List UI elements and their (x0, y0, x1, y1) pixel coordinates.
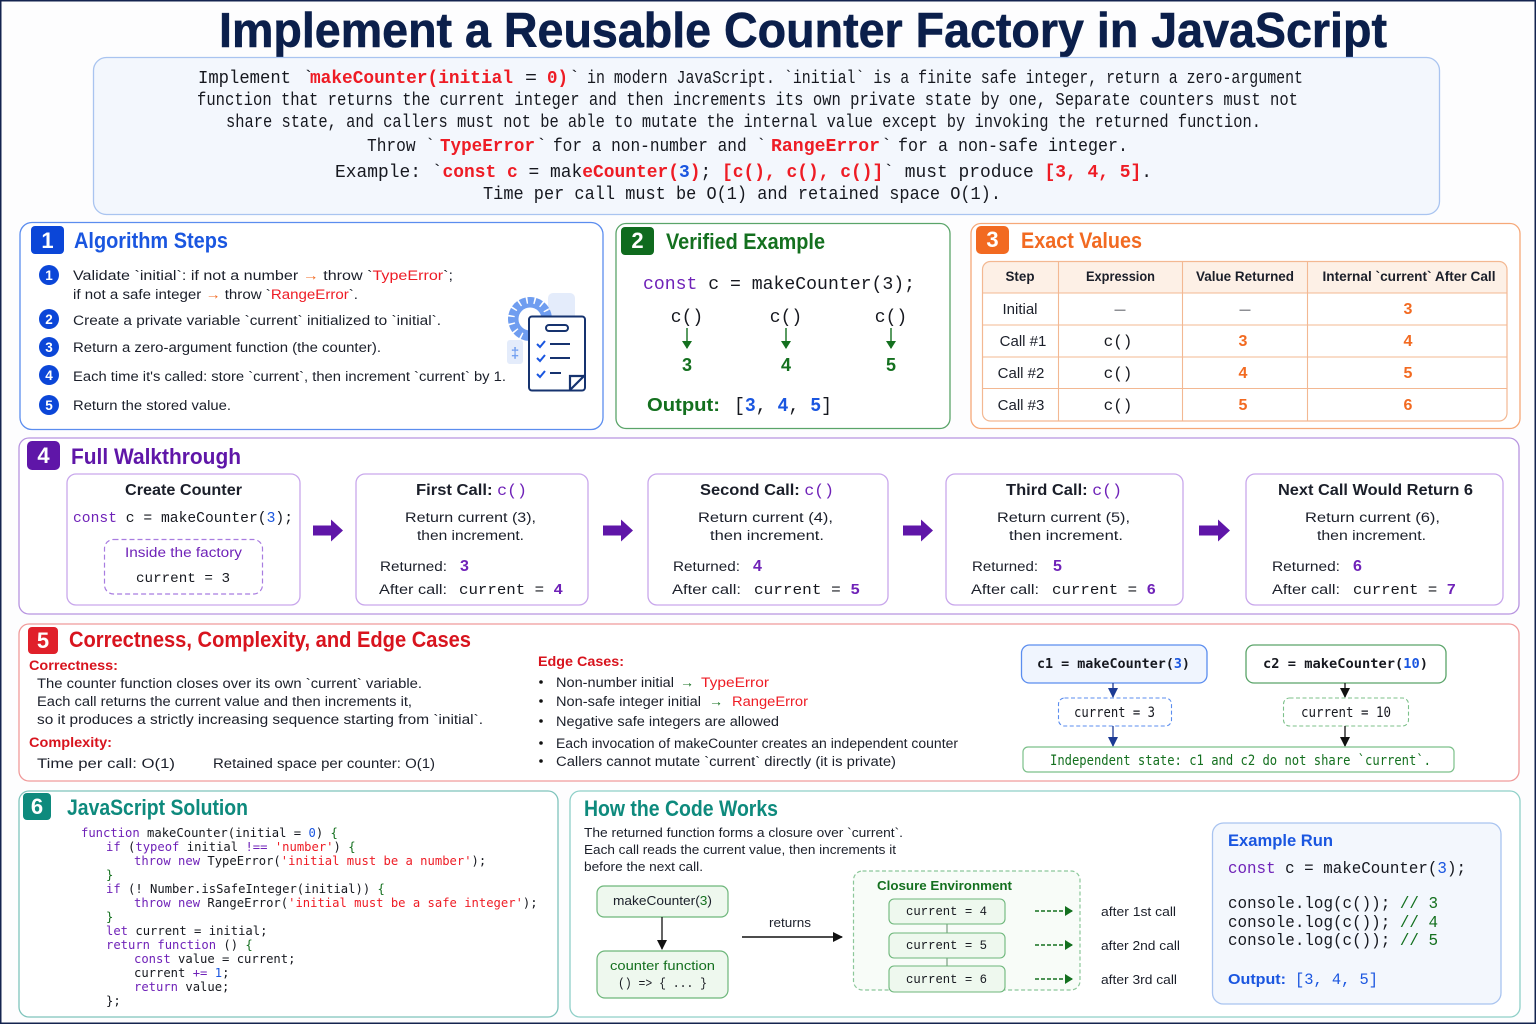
code block: } (106, 868, 113, 882)
code block: throw new TypeError('initial must be a number'); (134, 854, 486, 868)
flow: factory to counter function (597, 886, 728, 998)
table: c() (1104, 397, 1132, 415)
card: second call (648, 474, 888, 605)
card: create counter: Create Counter (125, 482, 242, 499)
text: correctness (29, 657, 483, 727)
card: next call: Return current (6), (1305, 510, 1440, 525)
card: first call (356, 474, 588, 605)
example run: [3, 4, 5] (1295, 971, 1378, 989)
call 1 (671, 308, 703, 375)
diagram: independent counters: c1 = makeCounter(3) (1037, 656, 1190, 672)
code block: current += 1; (134, 966, 229, 980)
call 3: 5 (886, 355, 896, 375)
closure environment (854, 871, 1080, 992)
example run: console.log(c()); // 3 (1228, 894, 1438, 913)
inner box: inside the factory: Inside the factory (125, 545, 242, 560)
code block: return function () { (106, 938, 253, 952)
badge 1: 1 (41, 228, 54, 253)
heading: how the code works: How the Code Works (584, 796, 778, 821)
step 2: Create a private variable `current` initialized to `initial`. (73, 313, 441, 328)
heading: verified example: Verified Example (666, 229, 825, 254)
example run: console.log(c()); // 5 (1228, 931, 1438, 950)
badge 6: 6 (31, 794, 43, 819)
text: edge cases: → (709, 694, 723, 709)
badge 5 (28, 627, 58, 654)
diagram: independent counters: c2 = makeCounter(10) (1263, 656, 1428, 672)
closure environment: current = 5 (906, 938, 987, 953)
arrow (1199, 520, 1230, 542)
card: next call: After call: (1272, 582, 1340, 597)
text: edge cases: RangeError (732, 694, 809, 709)
closure environment: current = 4 (906, 904, 987, 919)
dashed arrows with labels: after 1st call (1101, 905, 1176, 919)
card: next call: Next Call Would Return 6 (1278, 482, 1473, 499)
explanation text (584, 825, 903, 874)
flow: factory to counter function: counter function (610, 958, 715, 973)
code block: if (! Number.isSafeInteger(initial)) { (106, 882, 385, 896)
card: first call: then increment. (417, 528, 524, 543)
text: edge cases: Each invocation of makeCounter creates an independent counter (556, 736, 959, 751)
text: correctness: Each call returns the current value and then increments it, (37, 694, 412, 709)
diagram: independent counters: current = 3 (1074, 705, 1155, 721)
card: third call: Returned: (972, 559, 1038, 574)
arrow: returns: returns (769, 916, 811, 930)
flow: factory to counter function: makeCounter( 3) (613, 893, 712, 908)
panel 2: verified example (616, 224, 950, 428)
card: second call: Returned: (673, 559, 740, 574)
card: first call: First Call: c() (416, 482, 527, 500)
panel: problem statement: Example: `const c = makeCounter(3); [c(), c(), c()]` must produce [3, 4, 5]. (335, 163, 1152, 183)
panel: problem statement: ` (881, 137, 892, 157)
text: edge cases: Edge Cases: (538, 653, 624, 669)
table: 3 (1404, 301, 1413, 318)
badge 1 (31, 226, 64, 254)
panel: problem statement: Throw ` (367, 137, 435, 157)
step 5: Return the stored value. (73, 398, 231, 413)
call 1: 3 (682, 355, 692, 375)
inner box: inside the factory: current = 3 (136, 571, 230, 587)
card: third call: Return current (5), (997, 510, 1130, 525)
panel 1: algorithm steps (20, 222, 603, 430)
step 3 (39, 337, 381, 357)
heading: full walkthrough: Full Walkthrough (71, 444, 241, 469)
call 2: 4 (781, 355, 791, 375)
example run (1212, 823, 1501, 1004)
example run: const c = makeCounter(3); (1228, 859, 1466, 878)
step 1: 1 (45, 268, 53, 283)
step 5: 5 (45, 398, 53, 413)
table: 3 (1239, 333, 1248, 350)
table: 5 (1239, 397, 1248, 414)
panel: problem statement: RangeError (771, 137, 880, 157)
panel: problem statement: ` (536, 137, 547, 157)
icon: clipboard with gear: ‡ (511, 345, 519, 362)
table: Call #3 (998, 397, 1044, 414)
dashed arrows with labels (1035, 905, 1180, 987)
panel: problem statement: Time per call must be O(1) and retained space O(1). (483, 185, 1001, 205)
panel: problem statement: share state, and callers must not be able to mutate the internal value except by invoking the returned function. (226, 113, 1261, 133)
card: first call: Return current (3), (405, 510, 536, 525)
panel: problem statement: ` (569, 69, 580, 89)
text: edge cases: → (680, 675, 694, 690)
step 1 (39, 265, 453, 302)
table: c() (1104, 333, 1132, 351)
icon: clipboard with gear (507, 293, 585, 390)
output: Output: (647, 395, 720, 415)
dashed arrows with labels: after 2nd call (1101, 939, 1180, 953)
badge 6 (23, 793, 51, 820)
card: first call: Returned: (380, 559, 447, 574)
code block: let current = initial; (106, 924, 267, 938)
dashed arrows with labels: after 3rd call (1101, 973, 1177, 987)
card: third call: current = 6 (1052, 583, 1156, 599)
panel: problem statement: 0) (547, 69, 568, 89)
explanation text: The returned function forms a closure over `current`. (584, 825, 903, 840)
panel: problem statement: TypeError (440, 137, 535, 157)
table: Initial (1002, 301, 1038, 318)
table: 4 (1404, 333, 1413, 350)
card: third call (946, 474, 1183, 605)
panel: problem statement: for a non-safe integer. (898, 137, 1128, 157)
example run: console.log(c()); // 4 (1228, 913, 1438, 932)
step 2 (39, 309, 441, 329)
call 1: c() (671, 308, 703, 328)
table (982, 261, 1507, 421)
step 4: Each time it's called: store `current`, then increment `current` by 1. (73, 369, 506, 384)
explanation text: Each call reads the current value, then increments it (584, 842, 896, 857)
card: next call (1246, 474, 1503, 605)
closure environment: Closure Environment (877, 878, 1013, 893)
panel: problem statement: in modern JavaScript. `initial` is a finite safe integer, return a zero-argument (587, 69, 1303, 89)
code line: const c = makeCounter(3); (643, 275, 915, 295)
text: edge cases: Negative safe integers are allowed (556, 714, 779, 729)
panel: problem statement (94, 58, 1440, 214)
step 3: Return a zero-argument function (the counter). (73, 340, 381, 355)
panel: problem statement: Implement (198, 69, 291, 89)
table: 5 (1404, 365, 1413, 382)
panel: problem statement: function that returns the current integer and then increments its own private state by one, Separate counters must not (197, 91, 1298, 111)
step 3: 3 (45, 340, 53, 355)
code block (81, 826, 538, 1008)
code block: }; (106, 994, 121, 1008)
card: third call: then increment. (1009, 528, 1123, 543)
table: Call #2 (998, 365, 1044, 382)
card: first call: After call: (379, 582, 447, 597)
table: Internal `current` After Call (1322, 269, 1496, 284)
closure environment: current = 6 (906, 972, 987, 987)
card: first call: 3 (460, 558, 469, 575)
badge 4 (27, 441, 60, 470)
badge 2: 2 (631, 228, 644, 253)
heading: exact values: Exact Values (1021, 228, 1142, 253)
panel 3: exact values (971, 224, 1520, 428)
code block: const value = current; (134, 952, 295, 966)
card: next call: current = 7 (1353, 583, 1456, 599)
panel: problem statement: for a non-number and ` (553, 137, 766, 157)
card: third call: Third Call: c() (1006, 482, 1122, 500)
code block: } (106, 910, 113, 924)
table: Expression (1086, 269, 1155, 284)
text: edge cases: TypeError (701, 675, 770, 690)
card: third call: 5 (1053, 558, 1062, 575)
step 5 (39, 395, 231, 415)
card: second call: then increment. (710, 528, 824, 543)
heading: algorithm steps: Algorithm Steps (74, 228, 228, 253)
card: second call: 4 (753, 558, 762, 575)
card: second call: Second Call: c() (700, 482, 834, 500)
text: edge cases: Non-safe integer initial (556, 694, 701, 709)
flow: factory to counter function: () => { ... } (618, 976, 707, 991)
arrow (603, 520, 633, 542)
badge 2 (621, 227, 654, 255)
text: correctness: The counter function closes over its own `current` variable. (37, 676, 422, 691)
badge 5: 5 (37, 628, 49, 653)
card: second call: Return current (4), (698, 510, 833, 525)
card: first call: current = 4 (459, 583, 563, 599)
panel 4: full walkthrough (19, 438, 1519, 614)
call 2 (770, 308, 802, 375)
arrow (313, 520, 343, 542)
panel: problem statement: = (525, 69, 537, 89)
text: edge cases (538, 653, 959, 769)
heading: javascript solution: JavaScript Solution (67, 795, 248, 820)
table: 4 (1239, 365, 1248, 382)
card: next call: then increment. (1317, 528, 1426, 543)
panel 5: correctness, complexity, edge cases (19, 624, 1519, 781)
title: Implement a Reusable Counter Factory in JavaScript (219, 4, 1387, 58)
panel: problem statement: makeCounter(initial (310, 69, 513, 89)
code block: function makeCounter(initial = 0) { (81, 826, 338, 840)
badge 3: 3 (986, 227, 999, 252)
card: next call: 6 (1353, 558, 1362, 575)
table: — (1114, 304, 1126, 316)
text: correctness: Correctness: (29, 657, 118, 673)
badge 4: 4 (37, 443, 50, 468)
code block: throw new RangeError('initial must be a safe integer'); (134, 896, 538, 910)
example run: Output: (1228, 971, 1286, 988)
arrow (903, 520, 933, 542)
text: complexity: Time per call: O(1) (37, 756, 175, 771)
card: next call: Returned: (1272, 559, 1340, 574)
badge 3 (976, 226, 1009, 254)
diagram: independent counters: Independent state: c1 and c2 do not share `current`. (1050, 753, 1431, 769)
table: 6 (1404, 397, 1413, 414)
output (647, 395, 832, 417)
inner box: inside the factory (104, 540, 262, 594)
card: second call: current = 5 (754, 583, 860, 599)
card: second call: After call: (672, 582, 741, 597)
step 4: 4 (45, 368, 53, 383)
text: complexity: Retained space per counter: O(1) (213, 756, 435, 771)
example run: Example Run (1228, 831, 1333, 850)
table: Step (1006, 269, 1034, 284)
table: — (1240, 304, 1250, 316)
table: Call #1 (1000, 333, 1046, 350)
text: edge cases: Callers cannot mutate `current` directly (it is private) (556, 754, 896, 769)
text: complexity: Complexity: (29, 734, 112, 750)
panel 7: how the code works (570, 791, 1520, 1017)
table: Value Returned (1196, 269, 1294, 284)
code block: if (typeof initial !== 'number') { (106, 840, 356, 854)
panel: problem statement: ` (303, 69, 314, 89)
step 4 (39, 365, 506, 385)
diagram: independent counters (1022, 645, 1454, 772)
text: complexity (29, 734, 435, 771)
card: create counter (67, 474, 300, 605)
step 1: if not a safe integer → throw ` RangeError `. (73, 287, 358, 302)
card: create counter: const c = makeCounter(3); (73, 510, 293, 527)
diagram: independent counters: current = 10 (1301, 705, 1391, 721)
table: c() (1104, 365, 1132, 383)
call 3 (875, 308, 907, 375)
heading: correctness: Correctness, Complexity, and Edge Cases (69, 627, 471, 652)
output: [3, 4, 5] (734, 395, 832, 417)
arrow: returns (742, 916, 842, 937)
step 1: Validate `initial`: if not a number → throw ` TypeError `; (73, 268, 453, 283)
text: correctness: so it produces a strictly increasing sequence starting from `initial`. (37, 712, 483, 727)
code block: return value; (134, 980, 229, 994)
text: edge cases: Non-number initial (556, 675, 674, 690)
card: third call: After call: (971, 582, 1039, 597)
call 2: c() (770, 308, 802, 328)
call 3: c() (875, 308, 907, 328)
explanation text: before the next call. (584, 859, 703, 874)
step 2: 2 (45, 312, 53, 327)
panel 6: javascript solution (19, 791, 558, 1017)
